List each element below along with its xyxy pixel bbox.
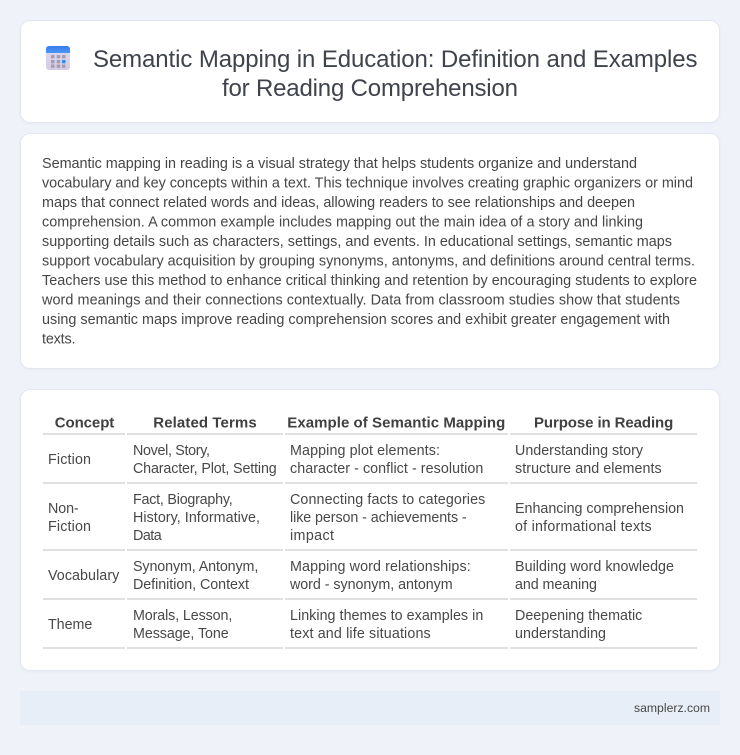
table header	[55, 414, 673, 432]
row: non-fiction: Enhancing comprehension	[515, 501, 684, 517]
row: fiction: character - conflict - resolution	[290, 461, 483, 477]
text block: description: vocabulary and key concepts within a text. This technique involves creating graphic organizers or mind	[42, 176, 693, 192]
text block: description: Teachers use this method to enhance critical thinking and retention by encouraging students to explore	[42, 273, 697, 289]
panel: title card	[20, 20, 720, 123]
row: non-fiction: of informational texts	[515, 519, 652, 535]
row: fiction: Fiction	[48, 452, 91, 468]
row: theme: Morals, Lesson,	[133, 608, 232, 624]
row: theme	[48, 608, 642, 642]
text block: description: Semantic mapping in reading is a visual strategy that helps students organize and understand	[42, 156, 637, 172]
footer text: samplerz.com	[634, 701, 710, 715]
row: non-fiction: Non-	[48, 501, 79, 517]
text block: description: using semantic maps improve reading comprehension scores and exhibit greater engagement with	[42, 312, 670, 328]
row: vocabulary	[48, 559, 674, 593]
row: vocabulary: Definition, Context	[133, 577, 249, 593]
row: non-fiction: Fiction	[48, 519, 91, 535]
title	[93, 46, 698, 102]
row: theme: Linking themes to examples in	[290, 608, 483, 624]
panel: table card	[20, 389, 720, 671]
row: vocabulary: Vocabulary	[48, 568, 120, 584]
row: non-fiction: Data	[133, 528, 162, 544]
title: Semantic Mapping in Education: Definition and Examples	[93, 46, 698, 73]
row: fiction: Character, Plot, Setting	[133, 461, 277, 477]
row: vocabulary: and meaning	[515, 577, 597, 593]
row: theme: Deepening thematic	[515, 608, 642, 624]
text block: description: supporting details such as characters, settings, and events. In educational settings, semantic maps	[42, 234, 672, 250]
row: non-fiction: History, Informative,	[133, 510, 260, 526]
table header: Related Terms	[153, 414, 257, 432]
row: fiction	[48, 443, 662, 477]
row: fiction: Understanding story	[515, 443, 644, 459]
table	[43, 414, 697, 649]
footer bar	[20, 691, 720, 725]
row: fiction: structure and elements	[515, 461, 662, 477]
row: non-fiction	[48, 492, 684, 544]
row: theme: understanding	[515, 626, 606, 642]
row: fiction: Mapping plot elements:	[290, 443, 440, 459]
text block: description: texts.	[42, 332, 76, 348]
table header: Concept	[55, 414, 114, 432]
row: theme: Message, Tone	[133, 626, 229, 642]
text block: description	[41, 156, 697, 348]
row: theme: Theme	[48, 617, 92, 633]
text block: description: maps that connect related words and ideas, allowing readers to see relationships and deepen	[42, 195, 635, 211]
row: vocabulary: word - synonym, antonym	[289, 577, 453, 593]
text block: description: support vocabulary acquisition by grouping synonyms, antonyms, and definitions around central terms.	[42, 254, 695, 270]
row: non-fiction: like person - achievements -	[290, 510, 467, 526]
row: non-fiction: Connecting facts to categories	[290, 492, 485, 508]
title: for Reading Comprehension	[222, 75, 518, 102]
icon: calendar	[46, 46, 70, 70]
text block: description: comprehension. A common example includes mapping out the main idea of a story and linking	[42, 214, 643, 230]
row: vocabulary: Mapping word relationships:	[290, 559, 471, 575]
row: theme: text and life situations	[290, 626, 431, 642]
row: fiction: Novel, Story,	[133, 443, 210, 459]
row: non-fiction: Fact, Biography,	[133, 492, 233, 508]
row: non-fiction: impact	[290, 528, 334, 544]
row: vocabulary: Synonym, Antonym,	[133, 559, 258, 575]
panel: description card	[20, 133, 720, 369]
table header: Example of Semantic Mapping	[287, 414, 505, 432]
row: vocabulary: Building word knowledge	[515, 559, 674, 575]
table header: Purpose in Reading	[534, 414, 673, 432]
text block: description: word meanings and their connections contextually. Data from classroom studies show that students	[41, 292, 680, 308]
